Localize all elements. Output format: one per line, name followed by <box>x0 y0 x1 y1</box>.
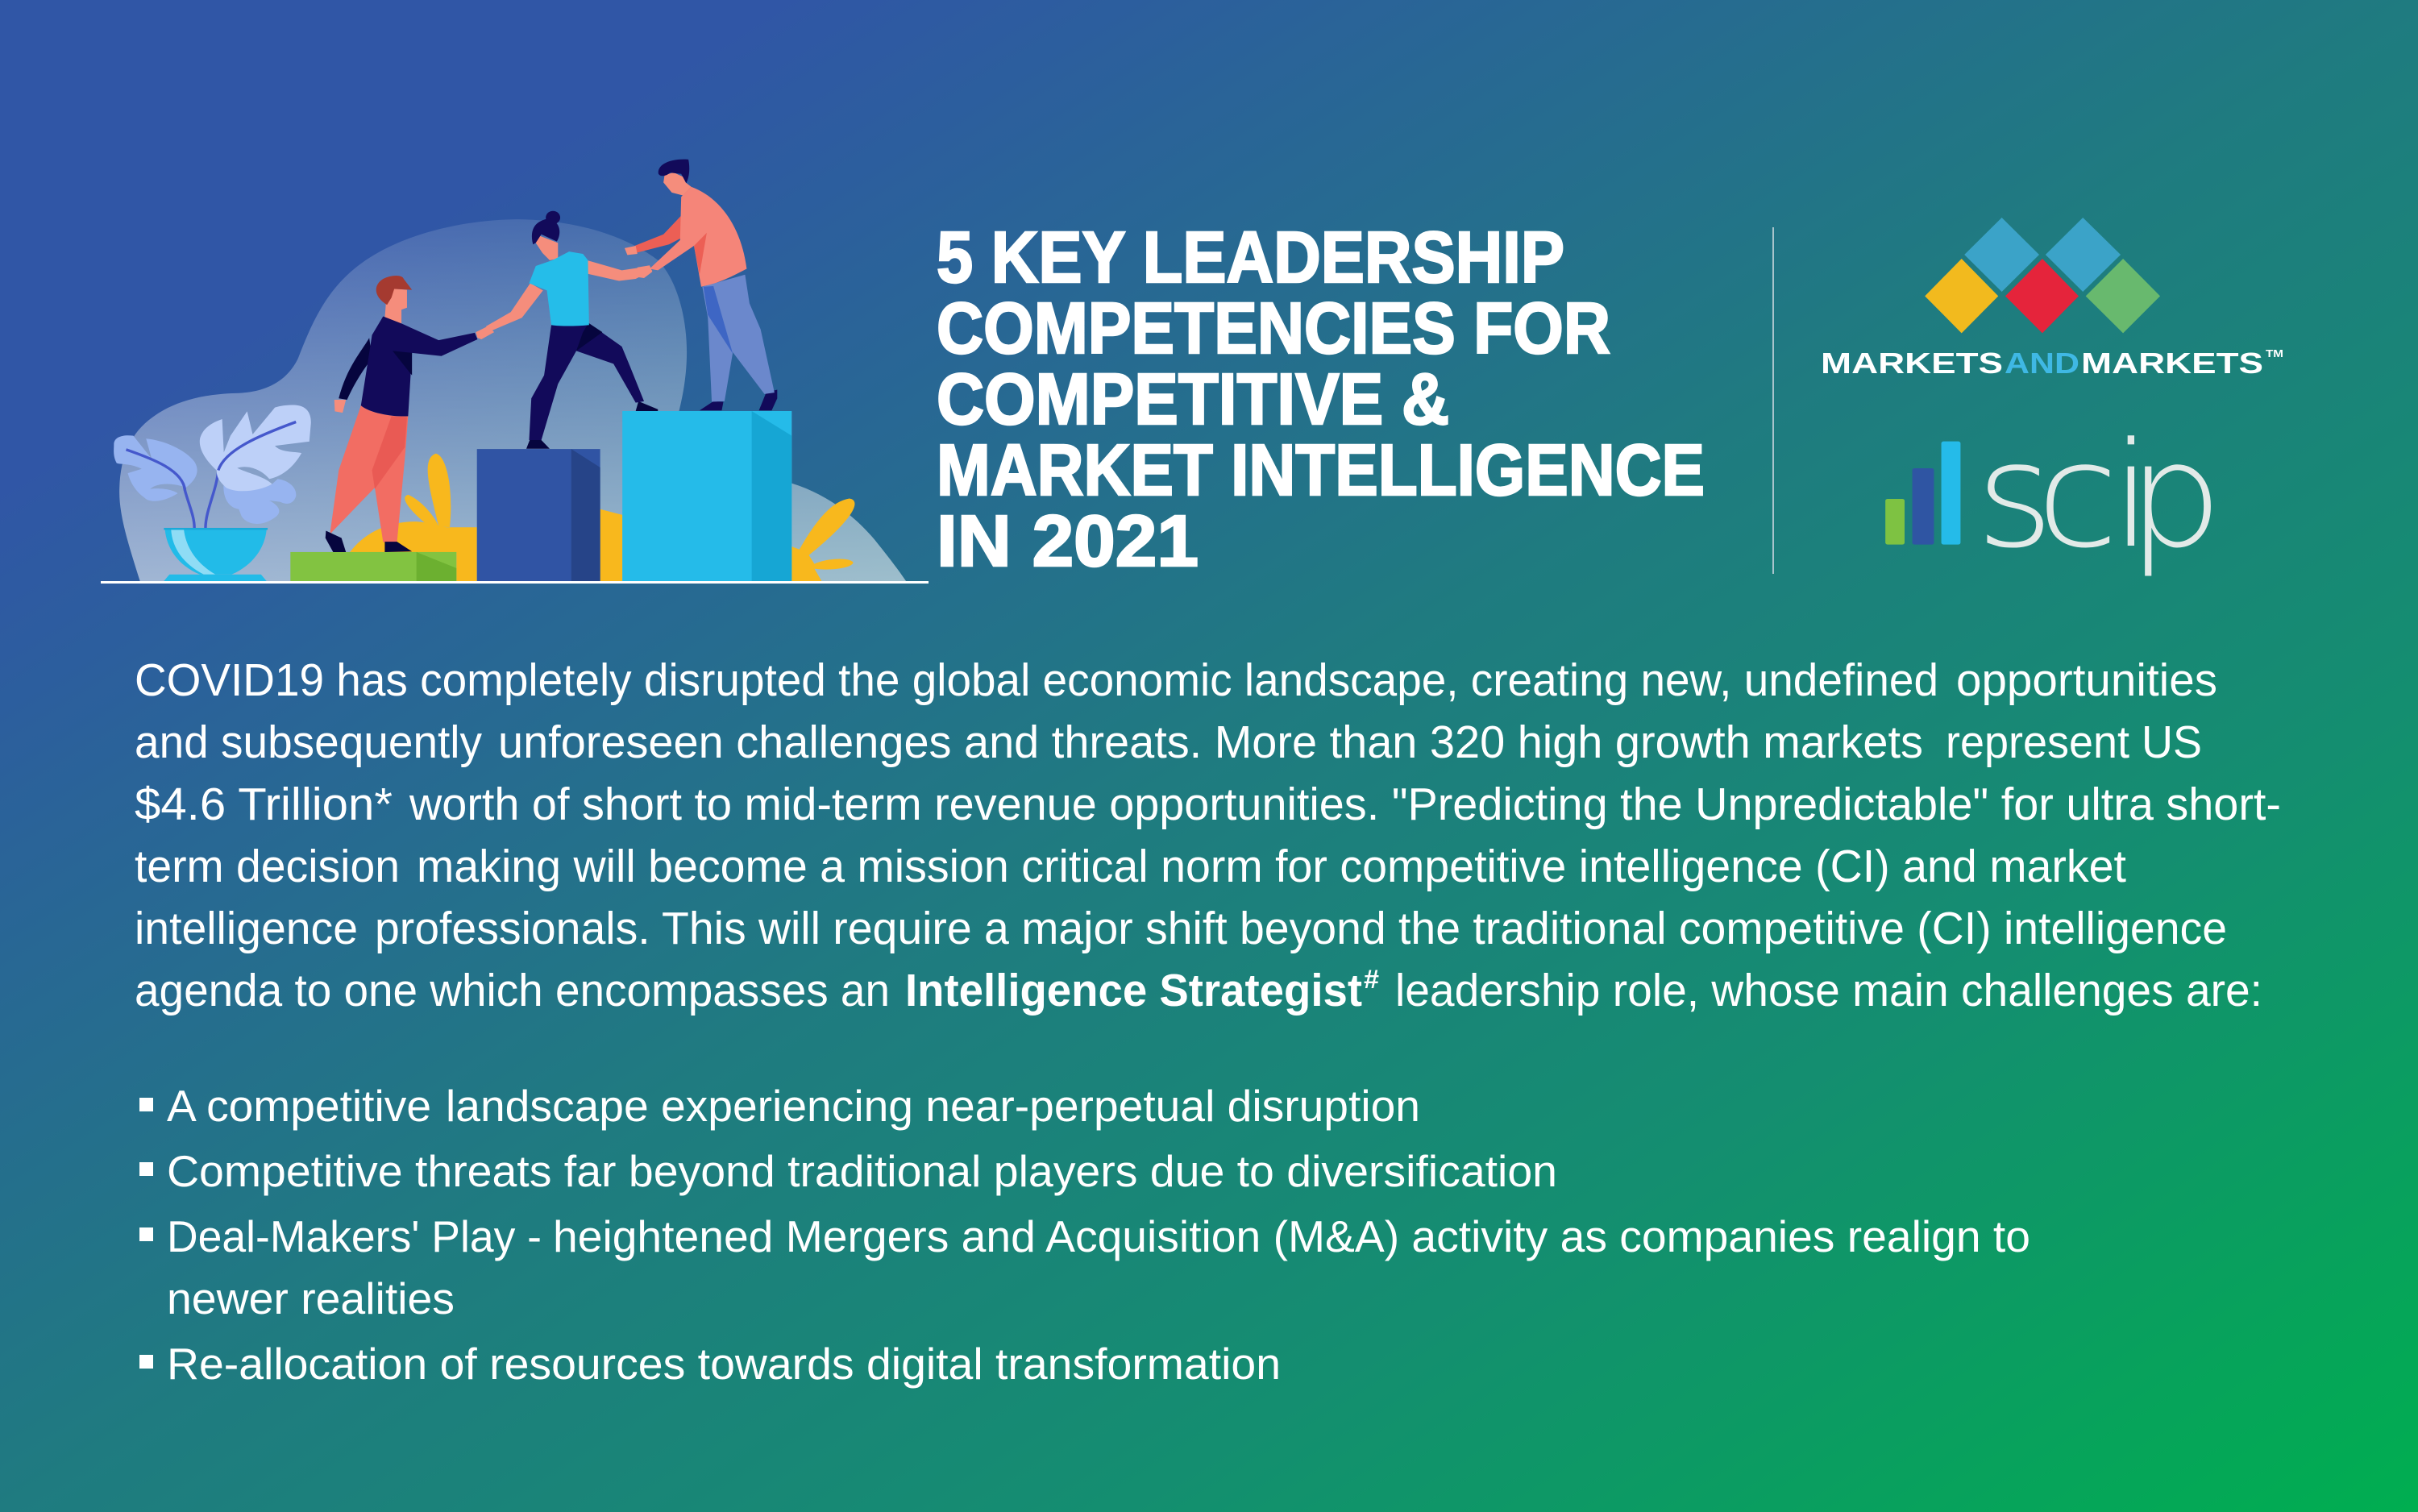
title: COMPETITIVE & <box>937 359 1449 440</box>
intro paragraph: COVID19 has completely disrupted the global economic landscape, creating new, undefined <box>135 654 1938 706</box>
title: 5 KEY LEADERSHIP <box>937 218 1564 298</box>
intro paragraph: leadership role, whose main challenges are: <box>1395 965 2262 1016</box>
person: woman on blue pillar <box>486 211 658 449</box>
title: COMPETENCIES FOR <box>937 289 1610 369</box>
logo wordmark: AND <box>2005 347 2079 380</box>
person: man on green step <box>326 276 494 552</box>
intro paragraph: intelligence <box>135 903 358 954</box>
logo wordmark: scip <box>1976 412 2223 580</box>
bullet 1: A competitive <box>167 1081 431 1131</box>
intro paragraph: and subsequently <box>135 717 482 768</box>
title: IN 2021 <box>937 501 1199 582</box>
bullet 1: landscape experiencing near-perpetual disruption <box>446 1081 1420 1131</box>
bullet 3 <box>139 1211 2030 1323</box>
yellow bush middle <box>600 509 622 581</box>
intro paragraph <box>135 654 2281 1016</box>
logo wordmark <box>1821 347 2283 380</box>
blue pillar <box>477 449 600 581</box>
background blob <box>119 219 906 581</box>
person: man on cyan pillar <box>625 160 777 410</box>
bullet 3: newer realities <box>167 1273 455 1323</box>
intro paragraph: professionals. This will require a major shift beyond the traditional competitive (CI) intelligence <box>375 903 2227 954</box>
cyan pillar <box>622 411 791 581</box>
ground line <box>101 581 929 584</box>
bullet 2: Competitive threats far beyond traditional players due to diversification <box>167 1146 1557 1196</box>
intro paragraph: agenda to one which encompasses an <box>135 965 890 1016</box>
bullet list <box>139 1081 2030 1389</box>
intro paragraph: # <box>1364 965 1379 994</box>
logo: MarketsandMarkets <box>1821 218 2283 380</box>
yellow plant right <box>791 499 854 581</box>
logo wordmark: MARKETS <box>1821 347 2003 380</box>
intro paragraph: Intelligence Strategist <box>905 965 1362 1016</box>
intro paragraph: worth of short to mid-term revenue opportunities. "Predicting the Unpredictable" for ultra short- <box>409 779 2281 830</box>
plant leaves <box>114 405 311 524</box>
title: MARKET INTELLIGENCE <box>937 430 1705 511</box>
logo wordmark: MARKETS <box>2081 347 2263 380</box>
flower pot <box>164 528 268 581</box>
logo: SCIP <box>1885 412 2223 580</box>
logo wordmark: TM <box>2266 347 2283 359</box>
logo diamonds <box>1925 218 2160 333</box>
plant stems <box>126 422 296 528</box>
intro paragraph: unforeseen challenges and threats. More than 320 high growth markets <box>498 717 1923 768</box>
intro paragraph: making will become a mission critical norm for competitive intelligence (CI) and market <box>417 841 2126 892</box>
green step <box>290 552 456 581</box>
intro paragraph: opportunities <box>1956 654 2217 706</box>
title <box>937 218 1705 582</box>
divider between title and logos <box>1772 227 1774 574</box>
illustration: team climbing pillars <box>114 160 906 581</box>
yellow bush blades <box>405 454 451 527</box>
bullet 3: heightened Mergers and Acquisition (M&A) activity as companies realign to <box>553 1211 2030 1261</box>
intro paragraph: represent US <box>1946 717 2202 768</box>
intro paragraph: term decision <box>135 841 400 892</box>
bullet 3: Deal-Makers' Play - <box>167 1211 542 1261</box>
logo bars <box>1885 442 1960 545</box>
intro paragraph: $4.6 Trillion* <box>135 779 393 830</box>
bullet 4: Re-allocation of resources towards digital transformation <box>167 1339 1281 1389</box>
yellow bush left <box>350 521 477 581</box>
